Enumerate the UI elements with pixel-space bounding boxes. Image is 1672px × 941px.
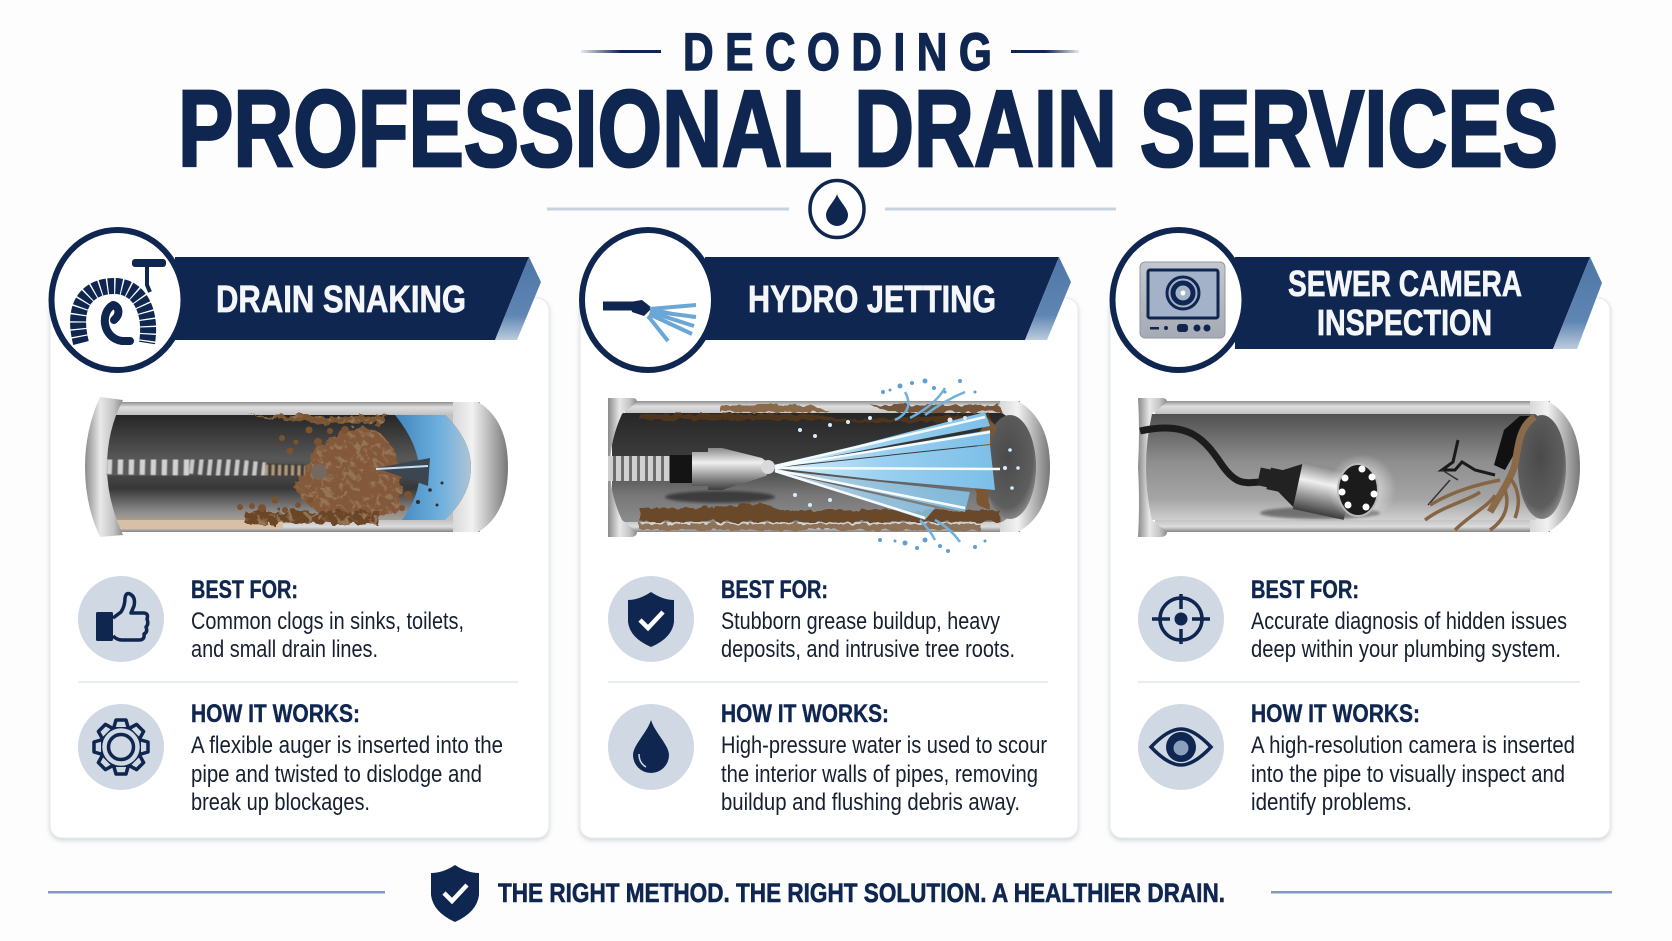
row: best for [608,576,1015,663]
row: how it works: into the pipe to visually inspect and [1251,761,1565,788]
header ribbon [705,257,1071,340]
icon: footer shield [431,865,479,922]
header ribbon [175,257,541,340]
row: best for: Accurate diagnosis of hidden issues [1251,608,1567,635]
card background [50,298,549,838]
panel: hydro jetting [580,230,1078,838]
row: best for: deep within your plumbing system. [1251,636,1561,663]
row: how it works: the interior walls of pipes, removing [721,761,1038,788]
row: best for: BEST FOR: [191,576,298,604]
icon: crosshair target [1138,576,1224,662]
icon: gear [78,704,164,790]
icon: camera monitor [1112,230,1244,370]
tagline: THE RIGHT METHOD. THE RIGHT SOLUTION. A HEALTHIER DRAIN. [498,878,1225,908]
row: how it works: pipe and twisted to dislodge and [191,761,482,788]
row: how it works [608,700,1047,816]
header ribbon: HYDRO JETTING [748,279,996,321]
row: how it works: HOW IT WORKS: [721,700,889,728]
row: how it works: A high-resolution camera is inserted [1251,732,1575,759]
row: best for: BEST FOR: [1251,576,1359,604]
icon: water drop [608,704,694,790]
panel: drain snaking [50,230,549,838]
illustration: water jet scouring pipe [608,378,1050,553]
icon: drain snake [52,230,184,370]
header ribbon [1235,257,1602,349]
icon: eye [1138,704,1224,790]
row: best for: and small drain lines. [191,636,378,663]
icon: water jet nozzle [582,230,714,370]
title block [178,24,1558,238]
row: how it works: identify problems. [1251,789,1412,816]
header ribbon: SEWER CAMERA [1288,263,1522,304]
row: how it works: High-pressure water is used to scour [721,732,1047,759]
row: best for [78,576,464,663]
row: best for: BEST FOR: [721,576,828,604]
row: best for: deposits, and intrusive tree roots. [721,636,1015,663]
row: how it works: break up blockages. [191,789,370,816]
title divider with water drop icon [547,180,1116,238]
row: best for [1138,576,1567,663]
illustration: drain snake in clogged pipe [85,397,508,537]
card background [1110,298,1610,838]
kicker: decoding: DECODING [683,24,992,82]
header ribbon: INSPECTION [1317,302,1492,343]
illustration: camera finding roots in pipe [1138,398,1580,537]
row: how it works [1138,700,1575,816]
footer banner [48,865,1612,922]
row: how it works: A flexible auger is inserted into the [191,732,503,759]
row: how it works: HOW IT WORKS: [191,700,360,728]
row: how it works: buildup and flushing debris away. [721,789,1020,816]
kicker: decoding [581,24,1079,82]
row: how it works [78,700,503,816]
panel: sewer camera inspection [1110,230,1610,838]
row: how it works: HOW IT WORKS: [1251,700,1420,728]
icon: thumbs up [78,576,164,662]
row: best for: Stubborn grease buildup, heavy [721,608,1000,635]
card background [580,298,1078,838]
icon: shield with check [608,576,694,662]
row: best for: Common clogs in sinks, toilets, [191,608,464,635]
header ribbon: DRAIN SNAKING [216,279,466,321]
